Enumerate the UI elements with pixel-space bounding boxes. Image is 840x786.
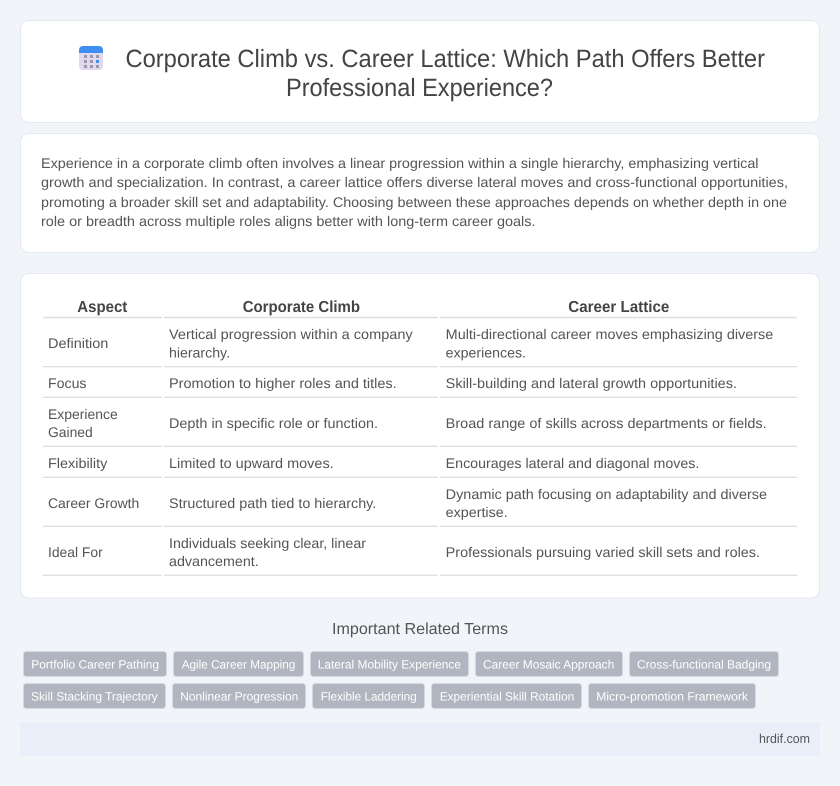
tag — [172, 684, 306, 708]
footer — [20, 722, 820, 756]
row: ideal for: Individuals seeking clear, linear — [169, 535, 366, 551]
icon: calendar — [79, 46, 103, 70]
text block: introduction: Experience in a corporate climb often involves a linear progression within a single hierarchy, emphasizing vertical — [41, 155, 758, 171]
row: experience gained: Depth in specific role or function. — [169, 415, 378, 431]
tag — [174, 652, 304, 676]
table header: Aspect — [77, 299, 128, 316]
tag: Agile Career Mapping — [182, 657, 295, 671]
row: career growth: Dynamic path focusing on adaptability and diverse — [446, 486, 767, 502]
table header: Career Lattice — [568, 299, 669, 316]
text block: introduction: promoting a broader skill set and adaptability. Choosing between these approaches depends on whether depth in one — [41, 194, 787, 210]
tag — [310, 652, 468, 676]
row: focus: Skill-building and lateral growth opportunities. — [446, 375, 737, 391]
tag: Flexible Laddering — [321, 689, 417, 703]
row: definition: hierarchy. — [169, 344, 230, 360]
panel: header — [20, 20, 820, 122]
row: definition: Multi-directional career moves emphasizing diverse — [446, 326, 774, 342]
text block: introduction: role or breadth across multiple roles aligns better with long-term career goals. — [41, 213, 536, 229]
row: experience gained — [43, 406, 797, 446]
tag — [630, 652, 778, 676]
tag — [312, 684, 424, 708]
tag: Cross-functional Badging — [637, 657, 771, 671]
tag: Experiential Skill Rotation — [440, 689, 574, 703]
row: flexibility: Flexibility — [48, 455, 107, 471]
row: career growth — [43, 486, 797, 526]
row: definition: experiences. — [446, 344, 526, 360]
row: focus: Focus — [48, 375, 86, 391]
heading: important related terms: Important Related Terms — [332, 621, 508, 638]
tag: Career Mosaic Approach — [483, 657, 614, 671]
tag — [432, 684, 582, 708]
row: focus — [43, 375, 797, 397]
tag — [476, 652, 622, 676]
tag — [588, 684, 756, 708]
row: flexibility: Limited to upward moves. — [169, 455, 334, 471]
row: ideal for: Professionals pursuing varied skill sets and roles. — [446, 544, 760, 560]
row: ideal for — [43, 535, 797, 575]
row: ideal for: Ideal For — [48, 544, 103, 560]
table header — [43, 299, 797, 318]
tag — [24, 652, 166, 676]
text block: introduction — [41, 155, 788, 229]
tag: Skill Stacking Trajectory — [31, 689, 158, 703]
panel: introduction — [20, 134, 820, 252]
title — [126, 45, 765, 102]
tag — [24, 684, 166, 708]
row: definition — [43, 326, 797, 367]
row: definition: Definition — [48, 335, 108, 351]
row: ideal for: advancement. — [169, 553, 259, 569]
row: career growth: Structured path tied to hierarchy. — [169, 495, 376, 511]
row: career growth: expertise. — [446, 504, 508, 520]
footer: hrdif.com — [759, 731, 810, 746]
tag: Micro-promotion Framework — [596, 689, 749, 703]
text block: introduction: growth and specialization. In contrast, a career lattice offers diverse lateral moves and cross-functional opportunities, — [41, 174, 788, 190]
tag: Portfolio Career Pathing — [31, 657, 159, 671]
title: Professional Experience? — [286, 74, 553, 102]
table header: Corporate Climb — [243, 299, 360, 316]
tag: Nonlinear Progression — [180, 689, 298, 703]
row: experience gained: Gained — [48, 424, 93, 440]
tags: related terms — [24, 652, 778, 708]
row: experience gained: Broad range of skills across departments or fields. — [446, 415, 767, 431]
tag: Lateral Mobility Experience — [318, 657, 461, 671]
title: Corporate Climb vs. Career Lattice: Which Path Offers Better — [126, 45, 765, 73]
row: experience gained: Experience — [48, 406, 118, 422]
row: definition: Vertical progression within a company — [169, 326, 413, 342]
panel: comparison table — [20, 274, 820, 598]
row: flexibility — [43, 455, 797, 477]
row: flexibility: Encourages lateral and diagonal moves. — [446, 455, 699, 471]
row: focus: Promotion to higher roles and titles. — [169, 375, 397, 391]
row: career growth: Career Growth — [48, 495, 139, 511]
